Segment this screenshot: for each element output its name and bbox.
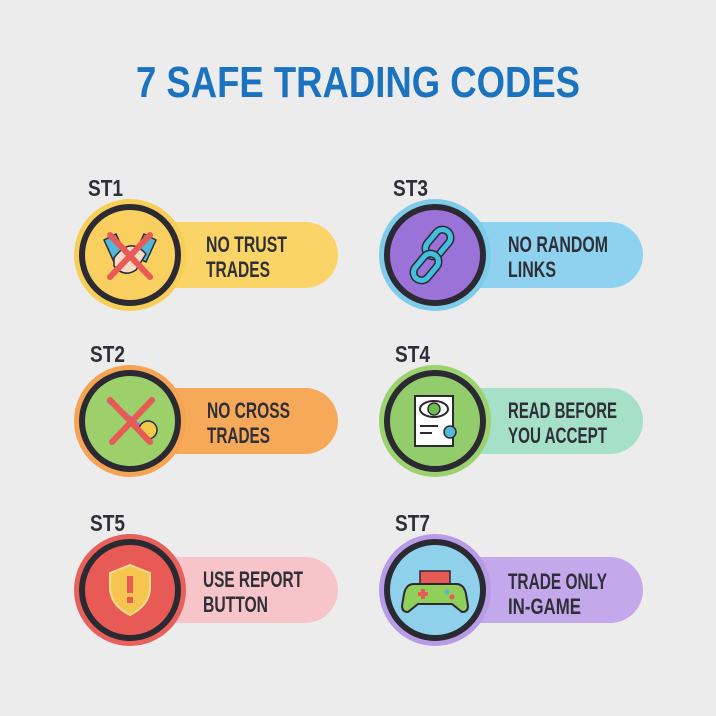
text: use report button: BUTTON [203, 592, 268, 617]
text: trade only in-game: IN-GAME [508, 594, 581, 619]
pill ST1 [140, 222, 338, 288]
text: trade only in-game [508, 569, 607, 619]
icon: shield [74, 534, 186, 646]
icon: crossed swap [74, 365, 186, 477]
panel: ST7 [379, 510, 643, 646]
pill ST3 [445, 222, 643, 288]
text: no random links [508, 232, 608, 282]
label ST5: ST5 [90, 510, 125, 536]
text: no random links: NO RANDOM [508, 232, 608, 257]
text: read before you accept: READ BEFORE [508, 398, 617, 423]
text: read before you accept [508, 398, 617, 448]
text: no cross trades: NO CROSS [207, 398, 290, 423]
text: use report button [203, 567, 303, 617]
text: use report button: USE REPORT [203, 567, 303, 592]
text: no cross trades: TRADES [207, 423, 270, 448]
title: 7 SAFE TRADING CODES [136, 58, 580, 107]
panel: ST5 [74, 510, 338, 646]
text: no cross trades [207, 398, 290, 448]
icon: document eye [379, 365, 491, 477]
text: no random links: LINKS [508, 257, 556, 282]
text: no trust trades [206, 232, 287, 282]
panel: ST2 [74, 341, 338, 477]
icon: chain link [379, 199, 491, 311]
icon: game controller [379, 534, 491, 646]
panel: ST4 [379, 341, 643, 477]
text: no trust trades: NO TRUST [206, 232, 287, 257]
label ST1: ST1 [88, 175, 123, 201]
pill ST2 [140, 388, 338, 454]
text: read before you accept: YOU ACCEPT [508, 423, 607, 448]
pill ST7 [445, 557, 643, 623]
label ST4: ST4 [395, 341, 430, 367]
panel: ST1 [74, 175, 338, 311]
label ST3: ST3 [393, 175, 428, 201]
icon: handshake crossed [74, 199, 186, 311]
text: no trust trades: TRADES [206, 257, 270, 282]
pill ST4 [445, 388, 643, 454]
label ST7: ST7 [395, 510, 430, 536]
pill ST5 [140, 557, 338, 623]
label ST2: ST2 [90, 341, 125, 367]
panel: ST3 [379, 175, 643, 311]
text: trade only in-game: TRADE ONLY [508, 569, 607, 594]
